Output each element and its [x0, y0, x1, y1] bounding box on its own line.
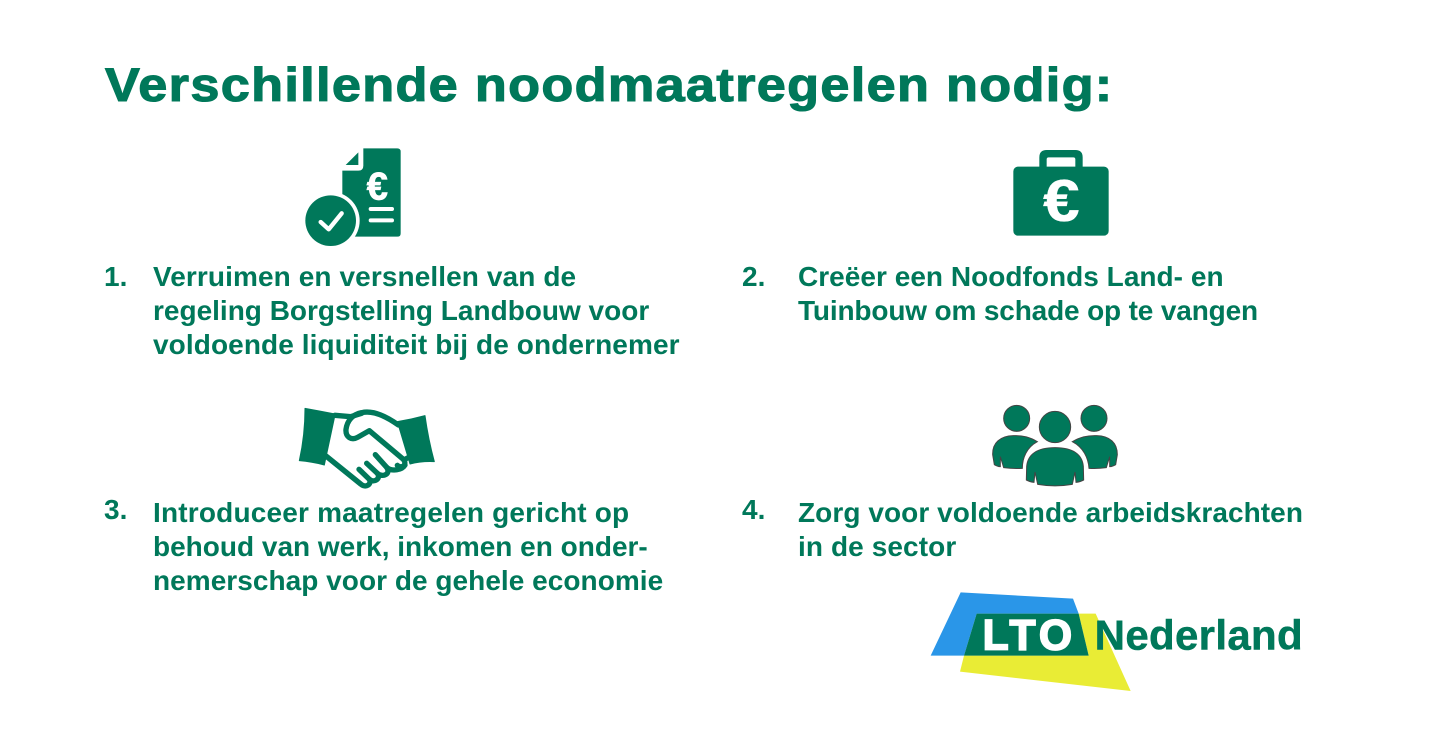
icon: group of three people — [992, 404, 1118, 486]
item 3 text: nemerschap voor de gehele economie — [153, 565, 663, 596]
item 2 text: Tuinbouw om schade op te vangen — [798, 295, 1258, 326]
logo: LTO Nederland: LTO — [983, 611, 1072, 659]
item 1 text — [153, 261, 680, 360]
item 3 text — [153, 497, 663, 596]
icon: briefcase with euro: € — [1043, 167, 1080, 234]
item 4 number: 4. — [742, 494, 765, 525]
item 3 text: behoud van werk, inkomen en onder- — [153, 531, 648, 562]
item 3 text: Introduceer maatregelen gericht op — [153, 497, 629, 528]
item 2 number: 2. — [742, 261, 765, 292]
icon: briefcase with euro — [1013, 150, 1109, 236]
item 4 text: Zorg voor voldoende arbeidskrachten — [798, 497, 1303, 528]
item 1 text: regeling Borgstelling Landbouw voor — [153, 295, 649, 326]
item 2 text — [798, 261, 1258, 326]
icon: document with euro and check mark — [305, 148, 401, 246]
icon: handshake — [298, 408, 435, 489]
item 1 text: Verruimen en versnellen van de — [153, 261, 576, 292]
logo: LTO Nederland: Nederland — [1095, 611, 1303, 658]
icon: document with euro and check mark: € — [367, 165, 388, 209]
logo: LTO Nederland — [930, 592, 1303, 691]
item 2 text: Creëer een Noodfonds Land- en — [798, 261, 1224, 292]
item 3 number: 3. — [104, 494, 127, 525]
title: Verschillende noodmaatregelen nodig: — [105, 59, 1114, 112]
item 1 text: voldoende liquiditeit bij de ondernemer — [153, 329, 680, 360]
item 4 text — [798, 497, 1303, 562]
item 1 number: 1. — [104, 261, 127, 292]
item 4 text: in de sector — [798, 531, 956, 562]
